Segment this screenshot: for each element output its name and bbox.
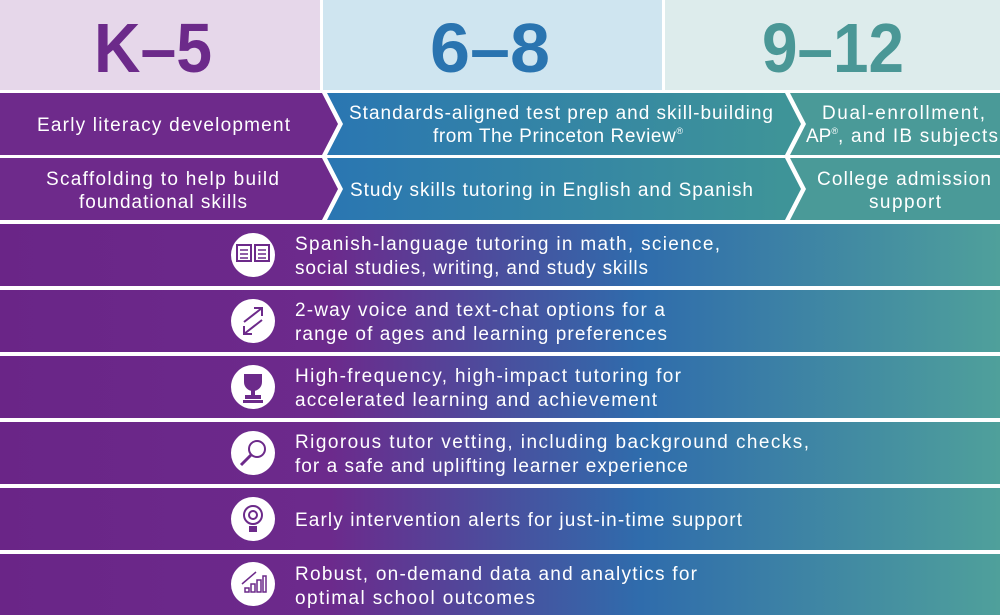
row 2: 9-12 chevron: College admission	[817, 169, 991, 190]
row 2: K-5 chevron	[0, 158, 338, 220]
header: K-5: K–5	[94, 9, 212, 87]
row 1: 9-12 chevron: , and IB subjects	[838, 126, 998, 147]
row 2: 6-8 chevron	[327, 158, 801, 220]
row 1: 9-12 chevron: Dual-enrollment,	[822, 103, 985, 124]
feature: Spanish tutoring: social studies, writing, and study skills	[295, 258, 648, 279]
feature: 2-way voice: range of ages and learning preferences	[295, 324, 667, 345]
row 1: 9-12 chevron: AP	[806, 126, 831, 147]
feature: analytics	[0, 554, 1000, 615]
icon: bar chart	[231, 562, 275, 606]
row 2: 6-8 chevron: Study skills tutoring in English and Spanish	[350, 180, 753, 201]
header: 6-8: 6–8	[430, 9, 550, 87]
row 1: 6-8 chevron: ®	[676, 126, 683, 136]
feature: early intervention: Early intervention alerts for just-in-time support	[295, 510, 743, 531]
feature: analytics: Robust, on-demand data and analytics for	[295, 564, 698, 585]
row 1: 9-12 chevron	[790, 93, 1000, 155]
feature: 2-way voice	[0, 290, 1000, 352]
row 2: K-5 chevron: Scaffolding to help build	[46, 169, 279, 190]
row 1: 6-8 chevron	[327, 93, 801, 155]
header: K-5	[0, 0, 320, 90]
icon: arrows	[231, 299, 275, 343]
icon: chat books	[231, 233, 275, 277]
row 2: 9-12 chevron	[790, 158, 1000, 220]
header: 9-12	[665, 0, 1000, 90]
row 1: 9-12 chevron: ®	[831, 126, 838, 136]
row 2: K-5 chevron: foundational skills	[79, 192, 247, 213]
row 1: K-5 chevron	[0, 93, 338, 155]
feature: high-frequency	[0, 356, 1000, 418]
row 1: K-5 chevron: Early literacy development	[37, 115, 291, 136]
row 1: 6-8 chevron: from The Princeton Review	[433, 126, 676, 147]
feature: early intervention	[0, 488, 1000, 550]
header: 9-12: 9–12	[762, 9, 904, 87]
feature: high-frequency: High-frequency, high-impact tutoring for	[295, 366, 682, 387]
icon: lightbulb target	[231, 497, 275, 541]
feature: vetting: for a safe and uplifting learner experience	[295, 456, 688, 477]
feature: vetting: Rigorous tutor vetting, including background checks,	[295, 432, 809, 453]
header: 6-8	[323, 0, 662, 90]
icon: magnifier	[231, 431, 275, 475]
feature: 2-way voice: 2-way voice and text-chat options for a	[295, 300, 665, 321]
row 1: 6-8 chevron: Standards-aligned test prep and skill-building	[349, 103, 773, 124]
feature: vetting	[0, 422, 1000, 484]
feature: high-frequency: accelerated learning and achievement	[295, 390, 658, 411]
feature: analytics: optimal school outcomes	[295, 588, 535, 609]
feature: Spanish tutoring	[0, 224, 1000, 286]
feature: Spanish tutoring: Spanish-language tutoring in math, science,	[295, 234, 720, 255]
row 2: 9-12 chevron: support	[869, 192, 942, 213]
icon: trophy	[231, 365, 275, 409]
